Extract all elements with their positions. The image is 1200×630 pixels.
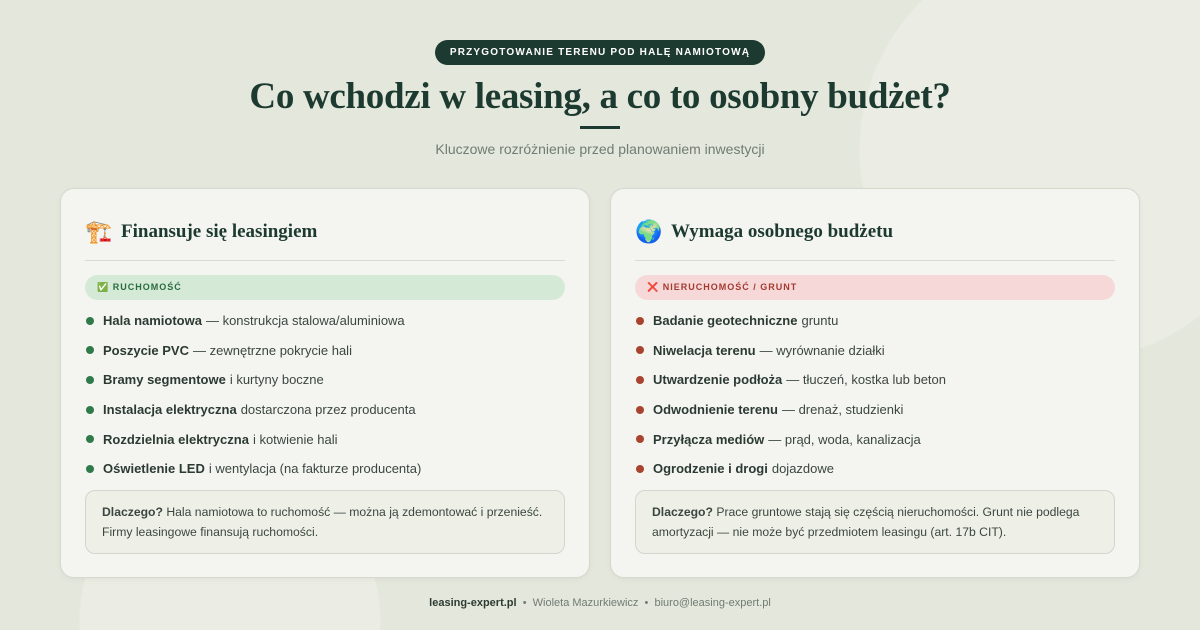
list: budget items: Badanie geotechniczne [653,313,797,328]
list: budget items: gruntu [801,313,838,328]
list: leasing items: Instalacja elektryczna [103,402,237,417]
list: budget items [636,313,946,476]
panel: leasing [60,188,590,578]
callout: why leasing [85,490,565,554]
list: leasing items: i wentylacja (na fakturze producenta) [209,461,421,476]
panel heading: Wymaga osobnego budżetu [671,221,893,242]
list: leasing items: i kurtyny boczne [230,372,324,387]
list: budget items: Odwodnienie terenu [653,402,778,417]
list: leasing items: Oświetlenie LED [103,461,205,476]
list: budget items: — prąd, woda, kanalizacja [768,432,921,447]
list: budget items: Przyłącza mediów [653,432,764,447]
list: leasing items: i kotwienie hali [253,432,338,447]
list: leasing items: Bramy segmentowe [103,372,226,387]
list: leasing items [86,313,421,476]
header pill [435,40,765,65]
panel: separate budget [610,188,1140,578]
list: budget items: Utwardzenie podłoża [653,372,782,387]
list: leasing items: Poszycie PVC [103,343,189,358]
callout: why budget [635,490,1115,554]
list: leasing items: — konstrukcja stalowa/aluminiowa [206,313,405,328]
list: leasing items: — zewnętrzne pokrycie hali [193,343,352,358]
list: leasing items: Rozdzielnia elektryczna [103,432,249,447]
list: budget items: — wyrównanie działki [760,343,885,358]
list: budget items: dojazdowe [772,461,834,476]
tag: ruchomość [85,275,565,300]
footer: leasing-expert.pl • Wioleta Mazurkiewicz • biuro@leasing-expert.pl [429,597,771,609]
subtitle: Kluczowe rozróżnienie przed planowaniem inwestycji [435,141,765,157]
panel heading: Finansuje się leasingiem [121,221,317,242]
tag: ruchomość: ✅ RUCHOMOŚĆ [97,282,182,292]
panel heading: 🏗️ [85,219,112,244]
list: budget items: Ogrodzenie i drogi [653,461,768,476]
header pill: PRZYGOTOWANIE TERENU POD HALĘ NAMIOTOWĄ [450,47,750,58]
list: leasing items: dostarczona przez producenta [241,402,416,417]
list: budget items: — tłuczeń, kostka lub beton [786,372,946,387]
panel heading: 🌍 [635,219,662,244]
list: budget items: — drenaż, studzienki [782,402,903,417]
tag: nieruchomość: ❌ NIERUCHOMOŚĆ / GRUNT [647,282,797,292]
tag: nieruchomość [635,275,1115,300]
title: Co wchodzi w leasing, a co to osobny budżet? [249,76,951,117]
list: budget items: Niwelacja terenu [653,343,756,358]
list: leasing items: Hala namiotowa [103,313,202,328]
callout: why budget: Dlaczego? Prace gruntowe stają się częścią nieruchomości. Grunt nie podlega amortyzacji — nie może być przedmiotem leasingu (art. 17b CIT). [652,505,1079,539]
callout: why leasing: Dlaczego? Hala namiotowa to ruchomość — można ją zdemontować i przenieść. Firmy leasingowe finansują ruchomości. [102,505,542,539]
